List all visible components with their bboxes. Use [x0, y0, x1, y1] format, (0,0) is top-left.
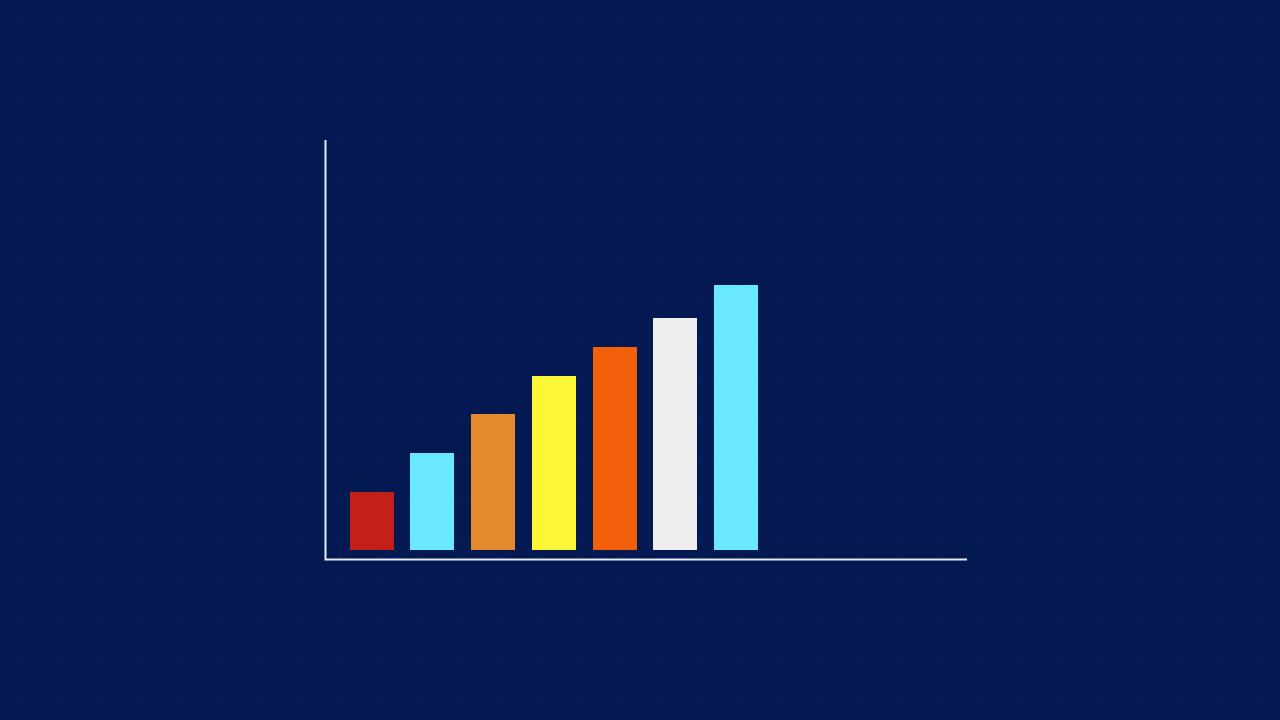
bar 3 orange — [471, 414, 515, 550]
axes — [326, 140, 967, 560]
bar 5 dark orange — [593, 347, 637, 550]
bar 4 yellow — [532, 376, 576, 550]
bar 2 cyan — [410, 453, 454, 550]
bar 7 cyan — [714, 285, 758, 550]
bar 1 red — [350, 492, 394, 550]
bar 6 white — [653, 318, 697, 550]
bar chart — [326, 140, 967, 560]
